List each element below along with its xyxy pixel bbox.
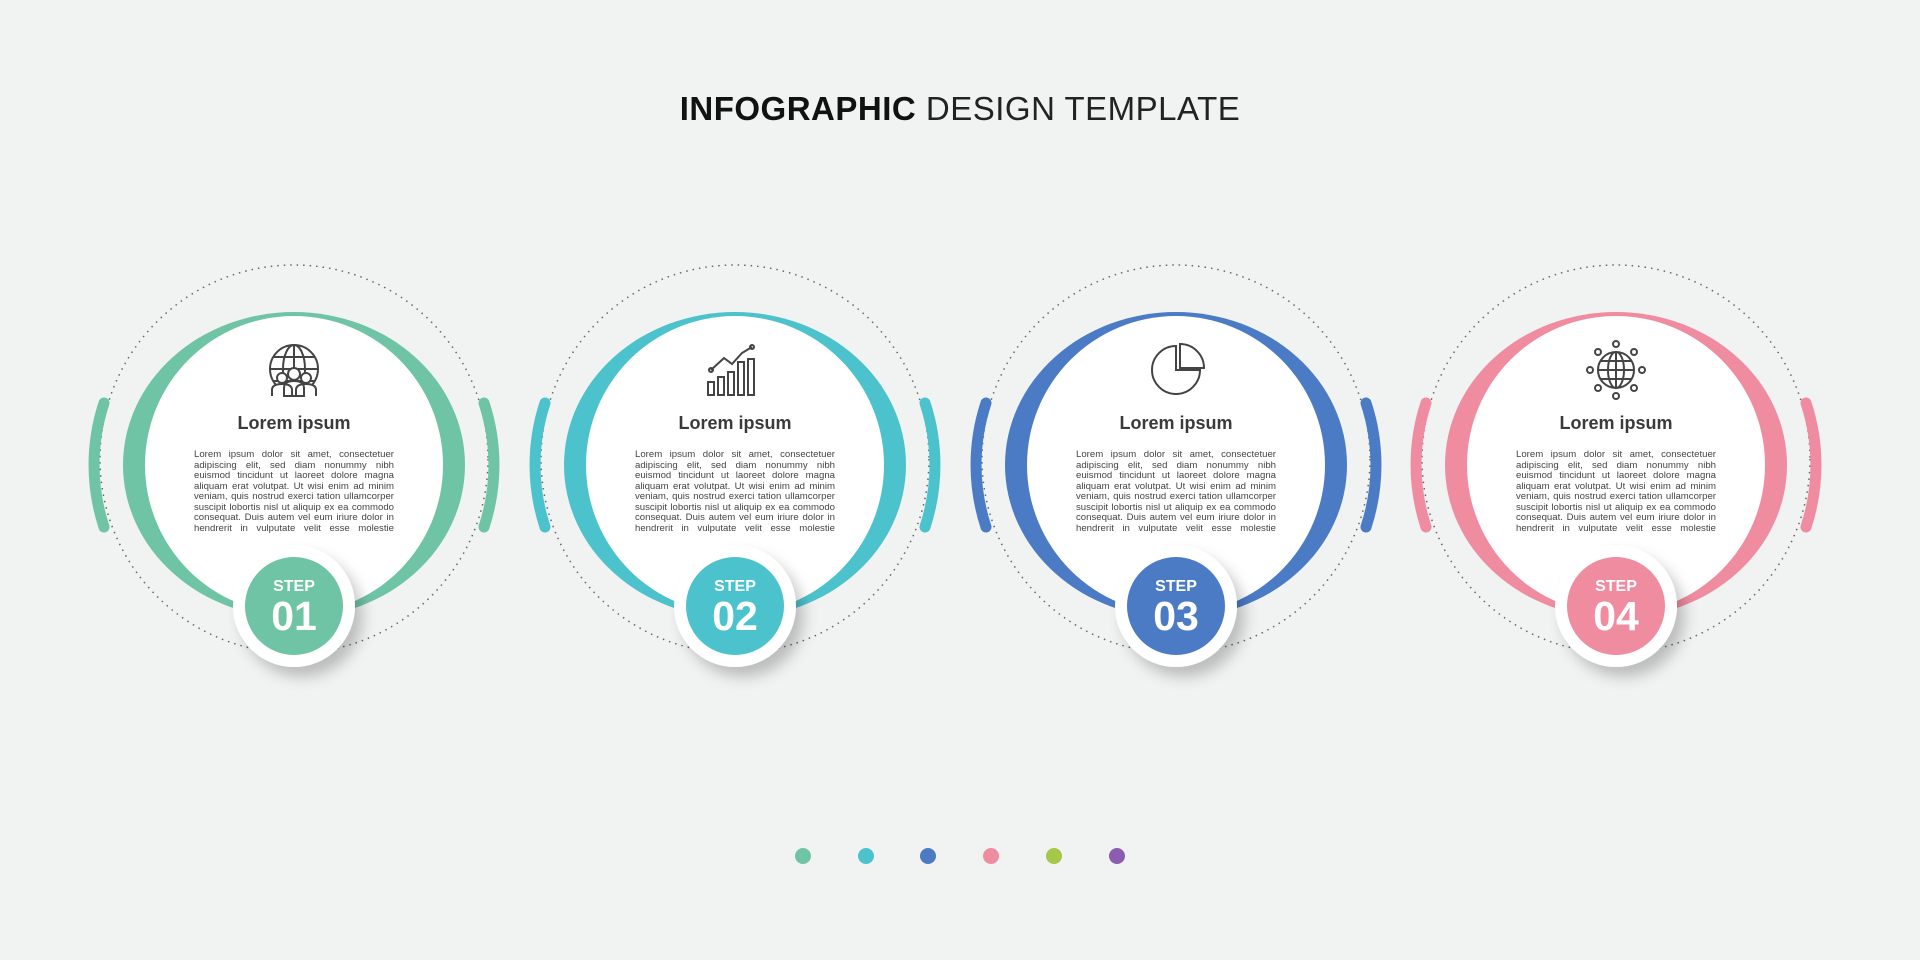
badge: step 1: STEP xyxy=(273,578,315,595)
text block: step 1: Lorem ipsum dolor sit amet, consectetuer adipiscing elit, sed diam nonummy nibh euismod tincidunt ut laoreet dolore magna aliquam erat volutpat. Ut wisi enim ad minim veniam, quis nostrud exerci tation ullamcorper suscipit lobortis nisl ut aliquip ex ea commodo consequat. Duis autem vel eum iriure dolor in hendrerit in vulputate velit esse molestie xyxy=(194,449,394,534)
title: INFOGRAPHIC DESIGN TEMPLATE xyxy=(680,90,1240,127)
panel: step 2 xyxy=(535,265,935,667)
panel: step 3 xyxy=(976,265,1376,667)
badge: step 3: STEP xyxy=(1155,578,1197,595)
text block: step 3: Lorem ipsum dolor sit amet, consectetuer adipiscing elit, sed diam nonummy nibh euismod tincidunt ut laoreet dolore magna aliquam erat volutpat. Ut wisi enim ad minim veniam, quis nostrud exerci tation ullamcorper suscipit lobortis nisl ut aliquip ex ea commodo consequat. Duis autem vel eum iriure dolor in hendrerit in vulputate velit esse molestie xyxy=(1076,449,1276,534)
text block: step 2: Lorem ipsum dolor sit amet, consectetuer adipiscing elit, sed diam nonummy nibh euismod tincidunt ut laoreet dolore magna aliquam erat volutpat. Ut wisi enim ad minim veniam, quis nostrud exerci tation ullamcorper suscipit lobortis nisl ut aliquip ex ea commodo consequat. Duis autem vel eum iriure dolor in hendrerit in vulputate velit esse molestie xyxy=(635,449,835,534)
icon: network globe xyxy=(1587,341,1645,399)
heading: step 4: Lorem ipsum xyxy=(1559,413,1673,433)
text block: step 4: Lorem ipsum dolor sit amet, consectetuer adipiscing elit, sed diam nonummy nibh euismod tincidunt ut laoreet dolore magna aliquam erat volutpat. Ut wisi enim ad minim veniam, quis nostrud exerci tation ullamcorper suscipit lobortis nisl ut aliquip ex ea commodo consequat. Duis autem vel eum iriure dolor in hendrerit in vulputate velit esse molestie xyxy=(1516,449,1716,534)
icon: pie chart xyxy=(1152,344,1204,394)
icon: bar chart xyxy=(708,345,754,395)
badge: step 4: 04 xyxy=(1593,593,1639,639)
icon: globe people xyxy=(270,345,318,396)
heading: step 2: Lorem ipsum xyxy=(678,413,792,433)
badge: step 3: 03 xyxy=(1153,593,1199,639)
panel: step 1 xyxy=(94,265,494,667)
badge: step 4: STEP xyxy=(1595,578,1637,595)
panel: step 4 xyxy=(1416,265,1816,667)
heading: step 1: Lorem ipsum xyxy=(237,413,351,433)
badge: step 2: 02 xyxy=(712,593,758,639)
badge: step 2: STEP xyxy=(714,578,756,595)
badge: step 1: 01 xyxy=(271,593,317,639)
heading: step 3: Lorem ipsum xyxy=(1119,413,1233,433)
legend dots xyxy=(795,848,1125,864)
